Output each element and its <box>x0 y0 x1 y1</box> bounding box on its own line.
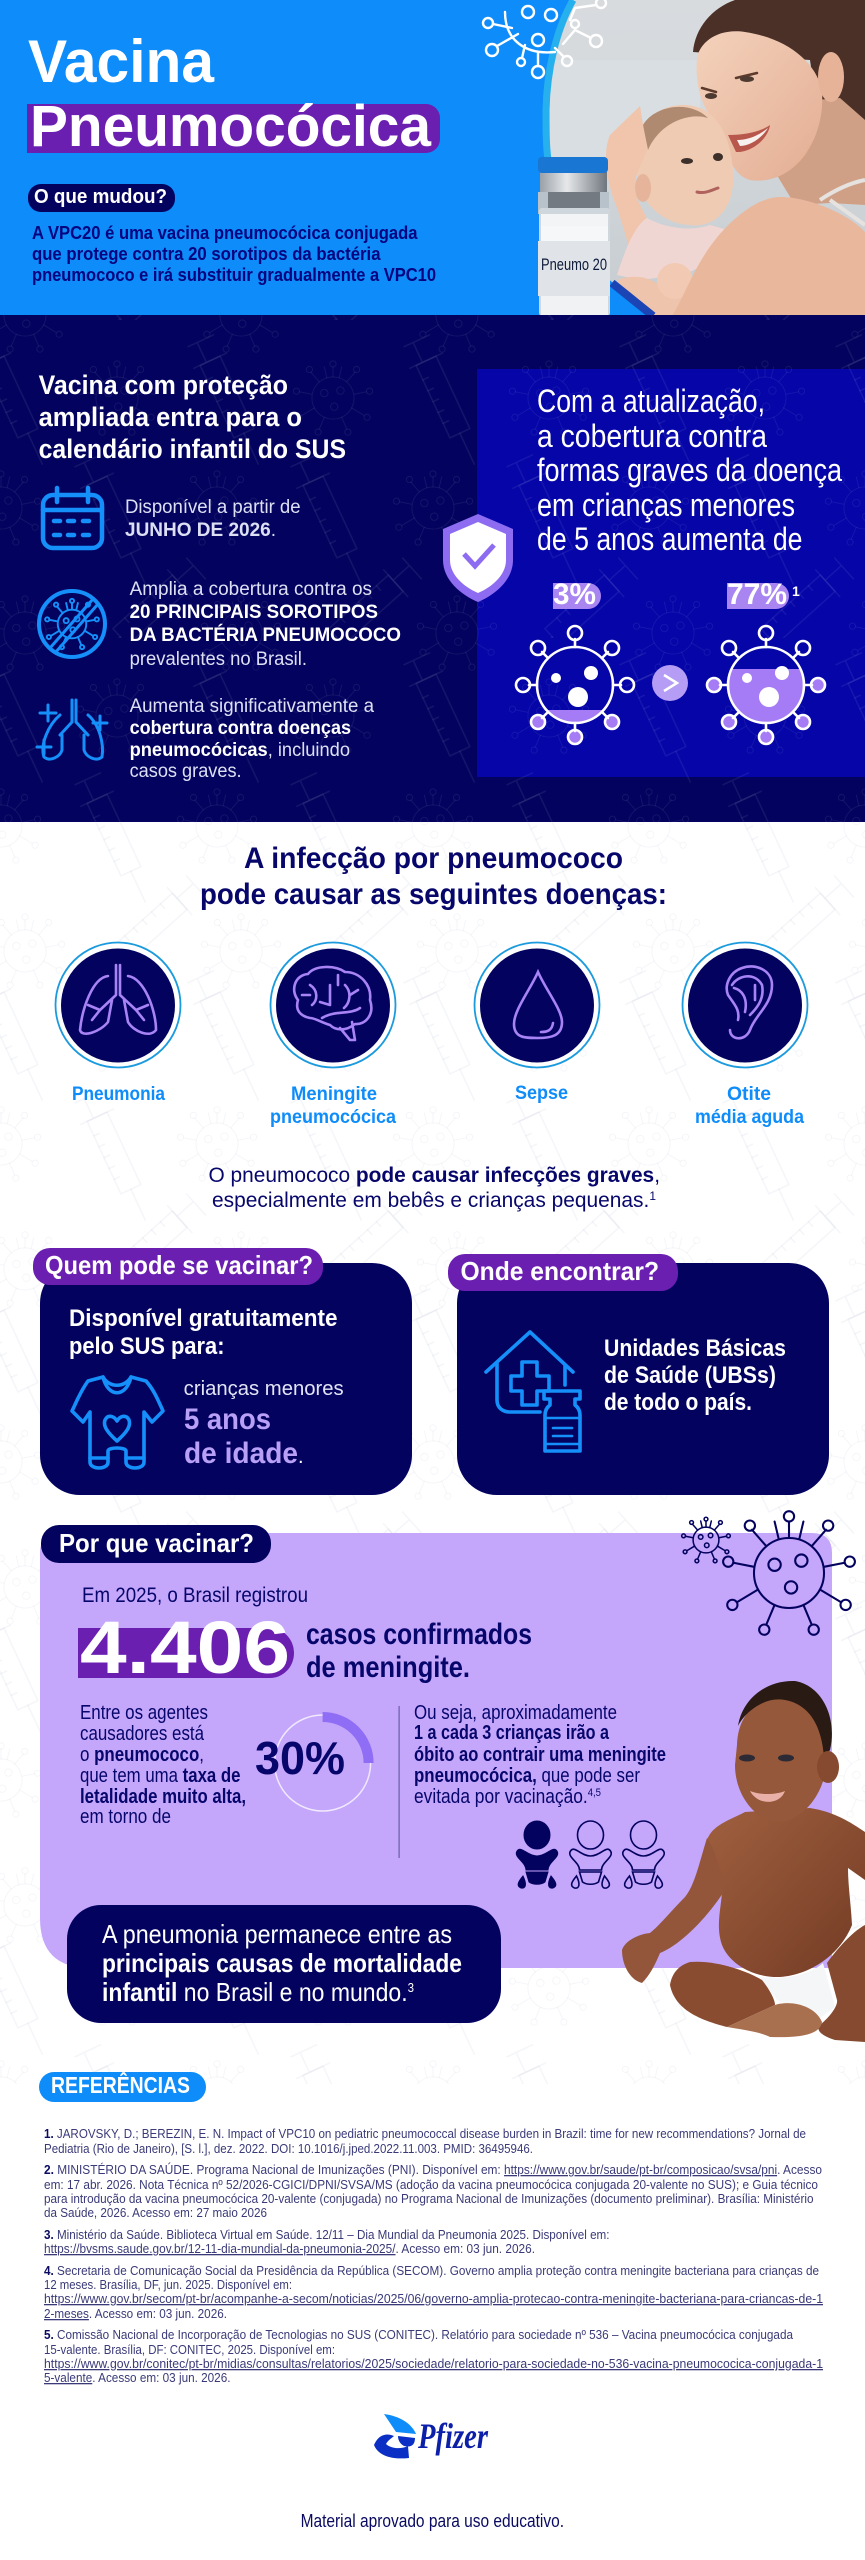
left arm and hand <box>622 1838 723 1983</box>
text: one in three: evitada por vacinação. <box>414 1786 614 1808</box>
reference 2: da Saúde, 2026. Acesso em: 27 maio 2026 <box>44 2205 267 2220</box>
icon: virus top <box>483 0 606 78</box>
logo: Pfizer: Pfizer <box>417 2416 489 2456</box>
disease: otitis <box>682 942 808 1068</box>
icon: onesie <box>72 1377 163 1468</box>
icon: shield <box>443 514 513 602</box>
heading: diseases: pode causar as seguintes doenças: <box>200 878 667 911</box>
reference 1 <box>44 2126 806 2156</box>
text: coverage statement <box>537 383 842 557</box>
right leg <box>818 1925 865 2042</box>
text: references list <box>44 2126 823 2385</box>
callout: pneumonia mortality: 3 <box>408 1980 414 1995</box>
icon: arrow circle <box>652 665 688 701</box>
badge: who: Quem pode se vacinar? <box>45 1250 313 1280</box>
reference 3: https://bvsms.saude.gov.br/12-11-dia-mundial-da-pneumonia-2025/. Acesso em: 03 jun. 2026. <box>44 2241 535 2256</box>
icon: lungs <box>80 965 156 1034</box>
text: serotypes: Amplia a cobertura contra os <box>130 579 372 600</box>
stat: 3 percent: 3% <box>553 578 596 611</box>
callout: pneumonia mortality: infantil no Brasil e no mundo. <box>102 1977 438 2007</box>
disease: pneumonia <box>56 942 180 1068</box>
disease labels <box>72 1083 804 1128</box>
badge: O que mudou?: O que mudou? <box>34 186 167 208</box>
icon: small virus <box>682 1517 730 1563</box>
divider <box>398 1706 400 1858</box>
reference 1: Pediatria (Rio de Janeiro), [S. l.], dez. 2022. DOI: 10.1016/j.jped.2022.11.003. PMID: 36495946. <box>44 2141 533 2156</box>
icon: three babies <box>516 1821 664 1888</box>
disease labels: Pneumonia <box>72 1084 165 1105</box>
icon: health unit and vial <box>486 1332 580 1451</box>
icon: lungs <box>37 700 107 759</box>
section: navy vaccine coverage <box>0 315 865 822</box>
text: agents: que tem uma taxa de <box>80 1765 240 1787</box>
reference 2 <box>44 2162 822 2220</box>
reference 5: 15-valente. Brasília, DF: CONITEC, 2025. Disponível em: <box>44 2342 335 2357</box>
text: children under five: crianças menores <box>184 1378 344 1400</box>
text: agents <box>80 1702 246 1828</box>
vaccine vial: Pneumo 20 <box>541 255 607 274</box>
text: serotypes: DA BACTÉRIA PNEUMOCOCO <box>130 624 401 646</box>
text: one in three: óbito ao contrair uma meningite <box>414 1744 666 1766</box>
text: agents: o pneumococo, <box>80 1744 204 1766</box>
mother hand <box>606 106 647 244</box>
text: coverage statement: de 5 anos aumenta de <box>537 521 802 557</box>
intro text: A VPC20 é uma vacina pneumocócica conjugada <box>32 223 418 243</box>
callout: pneumonia mortality: principais causas de mortalidade <box>102 1948 462 1978</box>
background pattern: white section <box>0 822 865 2084</box>
disease labels: Sepse <box>515 1083 568 1104</box>
intro text: pneumococo e irá substituir gradualmente a VPC10 <box>32 265 436 285</box>
text: confirmed cases: de meningite. <box>306 1651 470 1684</box>
reference 4: 12 meses. Brasília, DF, jun. 2025. Disponível em: <box>44 2277 292 2292</box>
text: approval note: Material aprovado para uso educativo. <box>301 2511 564 2531</box>
reference 5: 5-valente. Acesso em: 03 jun. 2026. <box>44 2370 230 2385</box>
text: disease coverage <box>130 696 374 782</box>
text: agents: letalidade muito alta, <box>80 1786 246 1808</box>
text: available date: Disponível a partir de <box>125 497 301 518</box>
text: free at SUS: Disponível gratuitamente <box>69 1305 338 1332</box>
panel: coverage update <box>477 369 865 777</box>
reference 4: https://www.gov.br/secom/pt-br/acompanhe-a-secom/noticias/2025/06/governo-amplia-protecao-contra-meningite-bacteriana-para-criancas-de-1 <box>44 2291 823 2306</box>
chart: 30 percent ring <box>255 1715 371 1811</box>
disease labels: Meningite <box>291 1084 377 1105</box>
title: Vacina <box>28 28 215 95</box>
hero banner <box>0 0 865 316</box>
ear <box>818 52 844 102</box>
text: disease coverage: pneumocócicas, incluindo <box>130 740 350 761</box>
reference 4: 2-meses. Acesso em: 03 jun. 2026. <box>44 2306 227 2321</box>
text: 2025 registered: Em 2025, o Brasil registrou <box>82 1584 308 1607</box>
reference 5 <box>44 2327 823 2385</box>
text: coverage statement: a cobertura contra <box>537 418 767 454</box>
text: free at SUS: pelo SUS para: <box>69 1333 224 1360</box>
stat: 77 percent: 77% <box>727 578 787 611</box>
text: agents: Entre os agentes <box>80 1702 208 1724</box>
card: who can be vaccinated <box>33 1248 412 1495</box>
text: serotypes: prevalentes no Brasil. <box>130 649 307 670</box>
baby head <box>636 105 733 225</box>
text: health units: de todo o país. <box>604 1389 752 1416</box>
hair <box>738 1681 832 1757</box>
badge: references: REFERÊNCIAS <box>51 2071 190 2098</box>
text: one in three: 1 a cada 3 crianças irão a <box>414 1722 610 1744</box>
text: severe infections: 1 <box>649 1189 656 1203</box>
text: severe infections: especialmente em bebês e crianças pequenas. <box>212 1189 651 1212</box>
text: available date <box>125 497 301 541</box>
intro text: que protege contra 20 sorotipos da bactéria <box>32 244 381 264</box>
baby shirt <box>617 218 728 280</box>
baby arm and hand <box>617 276 682 315</box>
title <box>27 28 440 159</box>
text: free at SUS <box>69 1305 338 1360</box>
ear <box>817 1751 839 1783</box>
heading: new vaccine: calendário infantil do SUS <box>39 434 346 464</box>
strap <box>820 180 865 225</box>
icon: brain <box>294 967 371 1040</box>
reference 5: https://www.gov.br/conitec/pt-br/midias/consultas/relatorios/2025/sociedade/relatorio-para-sociedade-no-536-vacina-pneumococica-conjugada-1 <box>44 2356 823 2371</box>
title: Pneumocócica <box>30 94 432 159</box>
photo frame arc <box>546 0 653 316</box>
photo: smiling baby <box>622 1681 865 2042</box>
heading: new vaccine <box>39 370 346 464</box>
text: one in three <box>414 1702 666 1808</box>
text: serotypes <box>130 579 401 670</box>
text: coverage statement: em crianças menores <box>537 487 795 523</box>
text: one in three: pneumocócica, que pode ser <box>414 1765 640 1787</box>
text: agents: causadores está <box>80 1723 205 1745</box>
reference 5: 5. Comissão Nacional de Incorporação de Tecnologias no SUS (CONITEC). Relatório para sociedade nº 536 – Vacina pneumocócica conjugada <box>44 2327 794 2342</box>
callout: pneumonia mortality <box>67 1905 501 2023</box>
disease labels: média aguda <box>695 1107 804 1128</box>
text: health units: de Saúde (UBSs) <box>604 1362 776 1389</box>
icon: virus high fill <box>707 626 825 744</box>
torso <box>707 1808 865 1977</box>
text: agents: em torno de <box>80 1806 171 1828</box>
text: children under five: 5 anos <box>184 1403 271 1436</box>
text: available date: JUNHO DE 2026. <box>125 520 276 541</box>
head <box>735 1698 824 1822</box>
icon: calendar <box>43 488 102 548</box>
logo: Pfizer <box>374 2414 489 2458</box>
left leg and foot <box>670 1962 775 2027</box>
text: severe infections <box>208 1164 660 1212</box>
text: serotypes: 20 PRINCIPAIS SOROTIPOS <box>130 602 378 623</box>
text: disease coverage: Aumenta significativamente a <box>130 696 374 717</box>
panel: why vaccinate <box>40 1511 855 2023</box>
icon: drop <box>514 972 562 1038</box>
text: disease coverage: casos graves. <box>130 761 242 782</box>
icon: virus low fill <box>516 626 634 744</box>
callout: pneumonia mortality: A pneumonia permanece entre as <box>102 1919 452 1949</box>
disease: meningitis <box>270 942 396 1068</box>
chart: 30 percent ring: 30% <box>255 1732 345 1784</box>
hair <box>693 0 865 120</box>
text: severe infections: O pneumococo pode causar infecções graves, <box>208 1164 660 1187</box>
diaper <box>760 1963 835 2018</box>
text: children under five: . <box>298 1446 304 1468</box>
icon: ear <box>727 966 772 1038</box>
heading: new vaccine: ampliada entra para o <box>39 402 302 432</box>
text: children under five: de idade <box>184 1437 298 1470</box>
icon: large virus <box>723 1511 855 1635</box>
disease labels: Otite <box>727 1084 771 1105</box>
text: confirmed cases <box>306 1618 532 1684</box>
reference 3: 3. Ministério da Saúde. Biblioteca Virtual em Saúde. 12/11 – Dia Mundial da Pneumonia 2025. Disponível em: <box>44 2227 610 2242</box>
photo: mother and baby <box>530 0 865 316</box>
face <box>697 31 822 181</box>
vaccine vial <box>538 157 610 316</box>
icon: crossed virus <box>39 591 105 657</box>
text: one in three: Ou seja, aproximadamente <box>414 1702 617 1724</box>
reference 4 <box>44 2263 823 2321</box>
eyes and smile <box>739 1754 794 1802</box>
heading: new vaccine: Vacina com proteção <box>39 370 288 400</box>
text: health units: Unidades Básicas <box>604 1335 786 1362</box>
text: health units <box>604 1335 786 1416</box>
text: children under five <box>184 1378 344 1470</box>
text: one in three: 4,5 <box>588 1787 601 1799</box>
badge: why: Por que vacinar? <box>59 1528 254 1558</box>
neck <box>775 98 865 205</box>
heading: diseases: A infecção por pneumococo <box>244 842 623 875</box>
stat: 4.406: 4.406 <box>80 1606 290 1689</box>
intro text <box>32 223 436 285</box>
disease: sepsis <box>474 942 600 1068</box>
mother shoulder <box>672 197 865 316</box>
stat: 77 percent: 1 <box>792 583 800 599</box>
text: confirmed cases: casos confirmados <box>306 1618 532 1651</box>
disease labels: pneumocócica <box>270 1107 396 1128</box>
card: where to find <box>448 1254 829 1495</box>
text: coverage statement: Com a atualização, <box>537 383 765 419</box>
reference 3 <box>44 2227 610 2256</box>
heading: diseases <box>200 842 667 911</box>
reference 2: 2. MINISTÉRIO DA SAÚDE. Programa Nacional de Imunizações (PNI). Disponível em: https://www.gov.br/saude/pt-br/composicao/svsa/pni. Acesso <box>44 2162 822 2177</box>
text: disease coverage: cobertura contra doenças <box>130 718 351 739</box>
badge: where: Onde encontrar? <box>460 1256 659 1286</box>
